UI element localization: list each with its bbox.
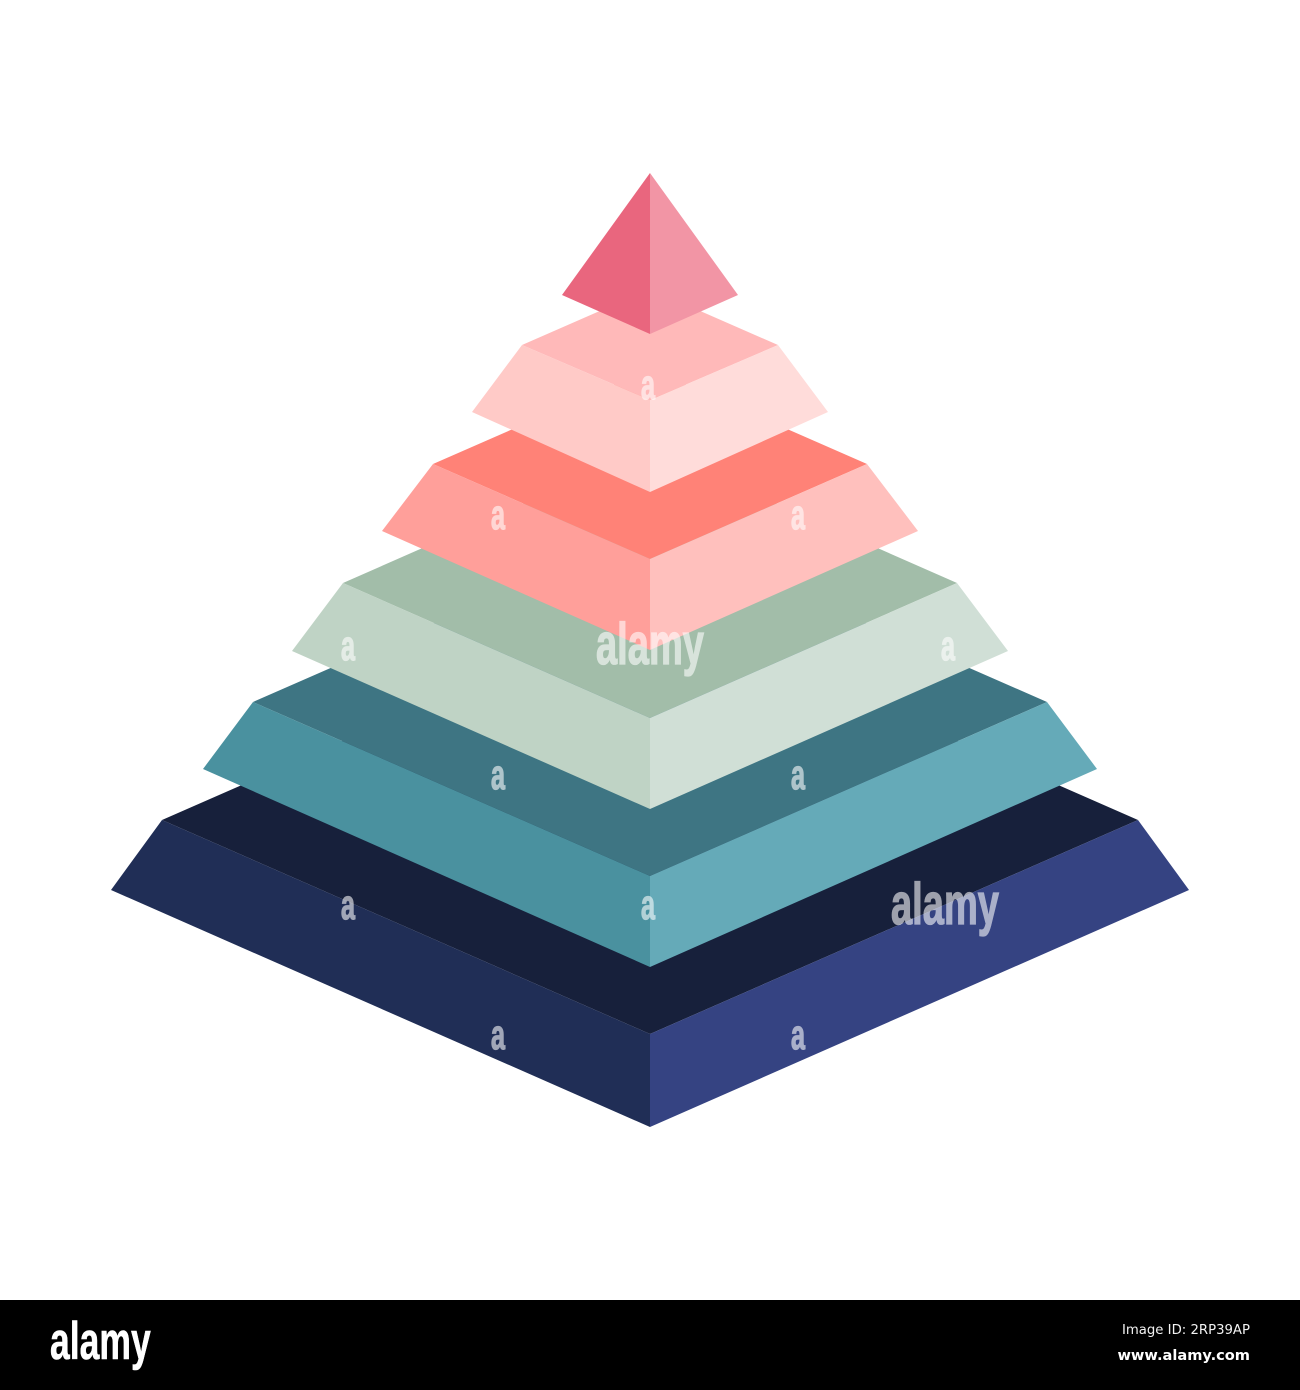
watermark: small marks: a — [791, 751, 805, 798]
watermark: small marks: a — [491, 491, 505, 538]
watermark: small marks: a — [341, 622, 355, 669]
watermark: small marks: a — [491, 751, 505, 798]
image id: Image ID: 2RP39AP — [1122, 1323, 1250, 1338]
watermark: large center: alamy — [596, 612, 704, 677]
layer 6: navy base — [111, 606, 1189, 1127]
watermark: small marks: a — [641, 881, 655, 928]
footer url: www.alamy.com — [1117, 1347, 1250, 1364]
layer 5: teal — [203, 528, 1097, 967]
watermark: small marks: a — [941, 622, 955, 669]
watermark: large lower right: alamy — [891, 872, 999, 937]
watermark: small marks: a — [341, 881, 355, 928]
footer bar — [0, 1300, 1300, 1390]
watermark: small marks: a — [491, 1011, 505, 1058]
watermark: small marks: a — [791, 1011, 805, 1058]
watermark: small marks: a — [791, 491, 805, 538]
layer 2: light pink — [472, 289, 828, 492]
layer 3: coral — [382, 369, 918, 650]
watermark: small marks — [341, 361, 955, 1058]
layer 1: apex — [562, 173, 738, 334]
layer 4: sage — [292, 448, 1008, 809]
footer logo: alamy — [50, 1312, 151, 1371]
watermark: small marks: a — [641, 361, 655, 408]
